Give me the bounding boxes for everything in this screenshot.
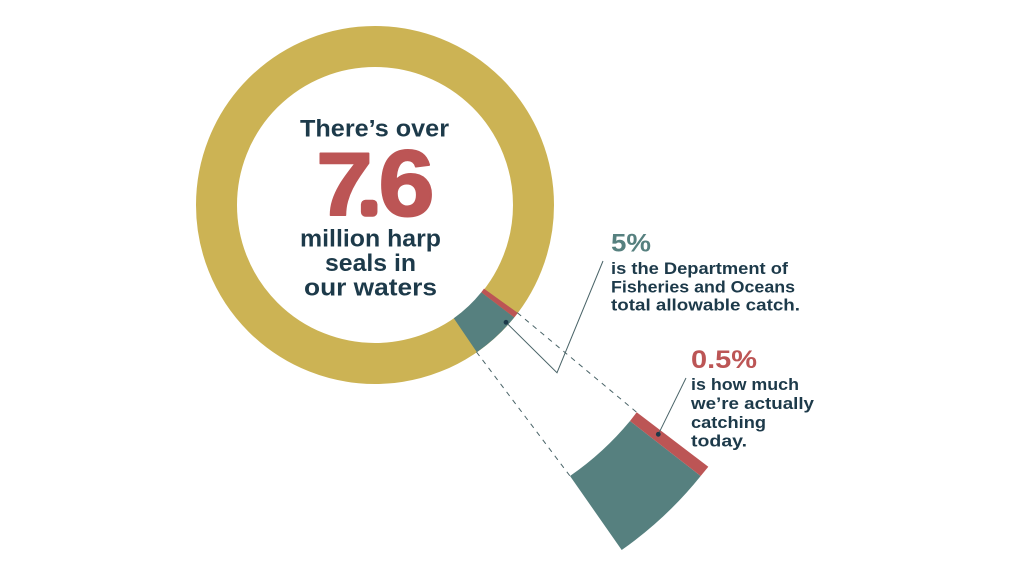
callout: 5% allowable catch [611, 230, 800, 314]
enlarged segment: 5% teal [570, 421, 701, 550]
callout text: how much we're catching: catching [691, 413, 766, 432]
callout number: 0.5%: 0.5% [691, 346, 757, 374]
ring segment: 5% allowable catch [454, 292, 514, 352]
callout: 0.5% actual catch [690, 346, 815, 450]
big number: 7.6: 6 [378, 130, 434, 236]
leader line: 0.5% callout [656, 378, 686, 437]
callout text: department of fisheries: total allowable catch. [611, 296, 800, 314]
text: million harp seals in our waters: our waters [304, 274, 437, 302]
big number: 7.6: . [362, 167, 376, 223]
callout text: how much we're catching: is how much [691, 375, 799, 394]
enlarged segment [570, 412, 708, 550]
callout number: 5%: 5% [611, 230, 651, 258]
ring: total population [216, 46, 534, 364]
dashed projection lines [476, 313, 637, 476]
leader line: 5% callout [504, 261, 603, 373]
callout text: department of fisheries: Fisheries and Oceans [611, 278, 795, 296]
text: million harp seals in our waters [300, 226, 441, 302]
text: million harp seals in our waters: million harp [300, 226, 441, 252]
callout text: how much we're catching [690, 375, 815, 450]
centre text: population headline [300, 116, 449, 302]
big number: 7.6: 7 [316, 136, 373, 236]
big number: 7.6 [316, 130, 434, 236]
enlarged segment: 0.5% red [630, 412, 708, 476]
callout text: department of fisheries: is the Department of [611, 259, 788, 278]
heading: there's over: There’s over [300, 116, 449, 142]
ring segment: 0.5% actual catch [481, 289, 518, 317]
callout text: department of fisheries [611, 259, 800, 314]
text: million harp seals in our waters: seals in [325, 250, 416, 277]
donut chart: seal population ring [216, 46, 534, 364]
callout text: how much we're catching: today. [691, 432, 747, 450]
callout text: how much we're catching: we’re actually [690, 394, 815, 413]
